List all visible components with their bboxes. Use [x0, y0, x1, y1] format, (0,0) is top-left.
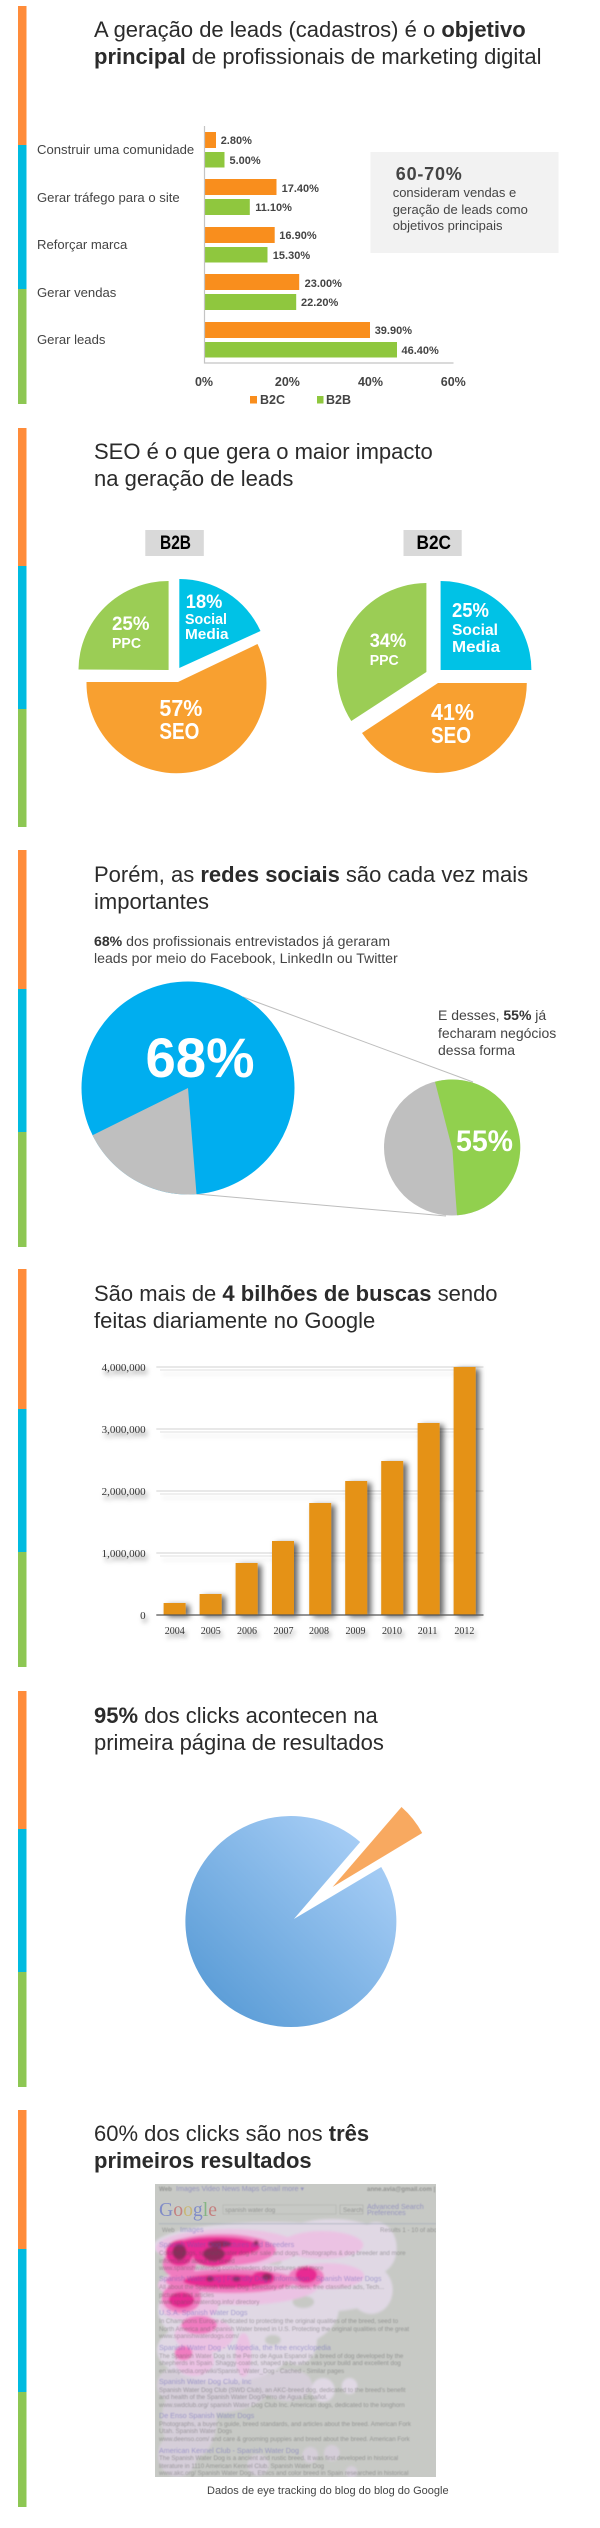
text: 68% of professionals: 68% dos profissionais entrevistados já geraram [94, 933, 390, 949]
search results page text: Preferences [367, 2208, 406, 2217]
search results page text: Spanish Water Dog - Wikipedia, the free encyclopedia [159, 2343, 331, 2352]
panel: section 5 first page clicks [18, 1691, 422, 2087]
search results page text: Search [343, 2207, 363, 2214]
pie chart: B2C: Media [452, 639, 500, 656]
search results page text: www.swdclub.org/ spanish Water Dog Club Inc. American dogs, dedicated to the longhorn [158, 2402, 405, 2409]
value labels [221, 135, 439, 357]
label: B2C: B2C [416, 533, 451, 554]
search results page text: and health of the Spanish Water Dog/Perro de Agua Español. [159, 2394, 328, 2401]
search results page text [158, 2184, 448, 2477]
search results page text: U.S.A. Spanish Water Dogs [159, 2308, 248, 2317]
heading 4 [94, 1281, 498, 1333]
search results page text: North America and Spanish Water breed in U.S. Protecting the original qualities of the great [159, 2326, 409, 2333]
Google logo: Google [159, 2199, 217, 2221]
bar chart: searches 2004 to 2012 [102, 1362, 484, 1637]
value labels: 39.90% [375, 325, 412, 337]
category labels: Reforçar marca [37, 237, 128, 252]
callout: 60-70%: objetivos principais [393, 218, 503, 233]
value labels: 2.80% [221, 135, 252, 147]
search results page text: Spanish Water Dog Club (SWD Club), an AKC-breed dog, dedicated to the breed's benefit [159, 2387, 406, 2394]
callout: 60-70%: 60-70% [396, 164, 462, 184]
bar chart: searches 2004 to 2012: 2012 [454, 1626, 474, 1637]
pie chart: 95% [185, 1807, 422, 2027]
value labels: 16.90% [279, 230, 317, 242]
search results page text: pictures and articles [159, 2292, 214, 2299]
search results page text: literature in 1110 American Kennel Club. Spanish Water Dog [159, 2463, 325, 2470]
search results page text: Utah. Spanish Water Dogs [159, 2428, 232, 2435]
text: 68% of professionals: leads por meio do Facebook, LinkedIn ou Twitter [94, 950, 398, 966]
panel: section 3 social networks [18, 850, 556, 1247]
search results page text: anne.avia@gmail.com | My [367, 2186, 446, 2193]
axis labels: 60% [441, 375, 466, 389]
bar chart: searches 2004 to 2012: 2007 [274, 1626, 294, 1637]
callout: 60-70%: geração de leads como [393, 202, 528, 217]
search results page text: Web [162, 2227, 175, 2234]
search results page text: All about the Spanish Water Dog: Directory of breeders, free classified ads, Tech... [159, 2284, 385, 2291]
heading 6: primeiros resultados [94, 2148, 312, 2173]
value labels: 22.20% [301, 297, 339, 309]
search results page text: Web [159, 2186, 172, 2193]
pie chart: 68% [82, 982, 294, 1195]
side colour bar 1 [18, 6, 26, 404]
pie chart: B2B: 18% [186, 592, 222, 613]
legend: B2B [326, 393, 351, 407]
axis labels: 0% [195, 375, 213, 389]
heading 1: A geração de leads (cadastros) é o objetivo [94, 17, 526, 42]
pie chart: B2B: PPC [112, 635, 141, 652]
label: B2B: B2B [160, 533, 191, 554]
pie chart: B2B: SEO [159, 718, 199, 744]
side colour bar 2 [18, 428, 26, 827]
search results page text: Colorful dogs, spanish water dog for sale and dogs. Photographs & dog breeder and more [159, 2250, 406, 2257]
heading 3: Porém, as redes sociais são cada vez mais [94, 862, 528, 887]
category labels: Gerar tráfego para o site [37, 190, 180, 205]
bar chart: searches 2004 to 2012: 2004 [165, 1626, 185, 1637]
value labels: 11.10% [255, 202, 292, 214]
search results page text: www.akc.org/ Spanish Water Dogs. Ethics and color breed in Spain researched in historical [158, 2470, 408, 2477]
heading 1 [94, 17, 542, 69]
bar chart: searches 2004 to 2012: 2008 [309, 1626, 329, 1637]
category labels: Gerar vendas [37, 285, 117, 300]
heading 1: principal de profissionais de marketing digital [94, 44, 542, 69]
pie chart: B2C: 41% [431, 699, 474, 725]
bar chart: searches 2004 to 2012: 2,000,000 [102, 1486, 146, 1498]
heading 4: São mais de 4 bilhões de buscas sendo [94, 1281, 498, 1306]
search results page text: Spanish Water Dog Pictures and Breeders [159, 2240, 295, 2249]
pie chart: B2C: PPC [370, 652, 399, 669]
search results page text: The Spanish Water Dog is the Perro de Agua Espanol is a breed of dog developed by the [159, 2353, 404, 2360]
search results page text: www.spanishwaterdog.com/breeders dog pictures and more [158, 2265, 324, 2272]
axis labels [195, 375, 466, 389]
search results page text: Spanish Water Dog | Friendly Dog | Information - Spanish Water Dogs [159, 2274, 382, 2283]
pie chart: B2C [337, 581, 531, 773]
bar chart: searches 2004 to 2012: 2009 [346, 1626, 366, 1637]
bar chart: searches 2004 to 2012: 2010 [382, 1626, 402, 1637]
panel: section 1 leads objective [18, 6, 558, 407]
value labels: 17.40% [282, 183, 319, 195]
search results page text: Spanish Water Dog Club, Inc [159, 2377, 252, 2386]
text: of those 55%: dessa forma [438, 1042, 515, 1058]
pie chart: B2C: Social [452, 622, 498, 639]
callout: 60-70%: consideram vendas e [393, 185, 516, 200]
search results page text: De Enso Spanish Water Dogs [159, 2411, 255, 2420]
pie chart: B2C: SEO [431, 722, 471, 748]
search results page text: Advanced Search [367, 2202, 424, 2211]
bars [204, 132, 397, 358]
search results page text: American Kennel Club - Spanish Water Dog [159, 2446, 299, 2455]
label: B2B [145, 530, 204, 556]
heading 6 [94, 2121, 369, 2173]
pie chart: B2B: Social [185, 612, 227, 628]
bar chart: searches 2004 to 2012: 1,000,000 [102, 1548, 146, 1560]
panel: section 2 SEO impact [18, 428, 531, 827]
value labels: 46.40% [402, 345, 439, 357]
text: of those 55%: fecharam negócios [438, 1025, 556, 1041]
connector lines [196, 997, 473, 1216]
callout: 60-70% [370, 152, 558, 253]
category labels: Construir uma comunidade [37, 142, 194, 157]
pie chart: B2C: 25% [452, 600, 489, 622]
text: of those 55%: E desses, 55% já [438, 1007, 546, 1023]
search results page text: www.spanishwaterdogs.com/ [158, 2333, 239, 2340]
heading 2: SEO é o que gera o maior impacto [94, 439, 433, 464]
pie chart: 68%: 68% [146, 1026, 254, 1089]
search results page text: information about the breed [159, 2258, 235, 2265]
pie chart: B2B: 57% [159, 695, 202, 721]
heading 3: importantes [94, 889, 209, 914]
search results page text: spanish water dog [225, 2207, 276, 2214]
pie chart: B2B: 25% [112, 614, 150, 635]
axis labels: 40% [358, 375, 383, 389]
label: B2C [404, 530, 462, 556]
bar chart: searches 2004 to 2012: 4,000,000 [102, 1362, 146, 1374]
text: 68% of professionals [94, 933, 398, 966]
search results page text: Images Video News Maps Gmail more ▾ [176, 2184, 304, 2193]
value labels: 5.00% [230, 155, 261, 167]
value labels: 15.30% [273, 250, 310, 262]
category labels [37, 142, 194, 347]
value labels: 23.00% [305, 278, 342, 290]
panel: section 4 searches per day [18, 1269, 498, 1667]
pie chart: B2C: 34% [370, 631, 406, 652]
heatmap: Google eye tracking [153, 2184, 448, 2478]
axes [204, 126, 454, 363]
heading 3 [94, 862, 528, 914]
heading 2 [94, 439, 433, 491]
search results page text: Results 1 - 10 of about 1 [380, 2227, 448, 2234]
heading 4: feitas diariamente no Google [94, 1308, 375, 1333]
pie chart: B2B: Media [185, 627, 229, 643]
heading 5: 95% dos clicks acontecen na [94, 1703, 379, 1728]
search results page text: en.wikipedia.org/wiki/Spanish_Water_Dog - Cached - Similar pages [159, 2368, 344, 2375]
pie chart: 55% [384, 1079, 520, 1216]
side colour bar 5 [18, 1691, 26, 2087]
heading 5 [94, 1703, 384, 1755]
heat areas [153, 2219, 397, 2478]
bar chart: searches 2004 to 2012: 2005 [201, 1626, 221, 1637]
pie chart: 55%: 55% [456, 1125, 513, 1158]
side colour bar 4 [18, 1269, 26, 1667]
bar chart: searches 2004 to 2012: 3,000,000 [102, 1424, 146, 1436]
search results page text: In Champions Europe dedicated to protecting the original qualities of the breed, seed to [159, 2318, 399, 2325]
search results page text: www.deenso.com/ and care & grooming puppies and breed about the breed. American Fork [158, 2436, 411, 2443]
search results page text: Images [180, 2225, 204, 2234]
side colour bar 3 [18, 850, 26, 1247]
panel: section 6 top results [18, 2110, 449, 2507]
heading 2: na geração de leads [94, 466, 293, 491]
search results page text: www.spanishwaterdog.info/ directory [158, 2299, 260, 2306]
pie chart: B2B [78, 579, 266, 773]
bar chart: searches 2004 to 2012: 2011 [418, 1626, 437, 1637]
heading 5: primeira página de resultados [94, 1730, 384, 1755]
search results page text: The Spanish Water Dog is a ancient and rustic breed. It was first developed in historical [159, 2455, 398, 2462]
search results page text: Photographs, a buyer's guide, breed standards, and articles about the breed. American Fork [159, 2421, 412, 2428]
legend [250, 393, 351, 407]
heading 6: 60% dos clicks são nos três [94, 2121, 369, 2146]
search results page text: shepherds in Spain. Shaggy-coated, shaped to be who was your build and excellent dog [159, 2360, 401, 2367]
axis labels: 20% [275, 375, 300, 389]
legend: B2C [260, 393, 285, 407]
caption: Dados de eye tracking do blog do blog do Google [207, 2485, 449, 2497]
text: of those 55% [438, 1007, 556, 1058]
side colour bar 6 [18, 2110, 26, 2507]
bar chart: searches 2004 to 2012: 0 [140, 1610, 146, 1622]
category labels: Gerar leads [37, 332, 106, 347]
bar chart: objectives by B2C and B2B [37, 126, 466, 407]
bar chart: searches 2004 to 2012: 2006 [237, 1626, 257, 1637]
